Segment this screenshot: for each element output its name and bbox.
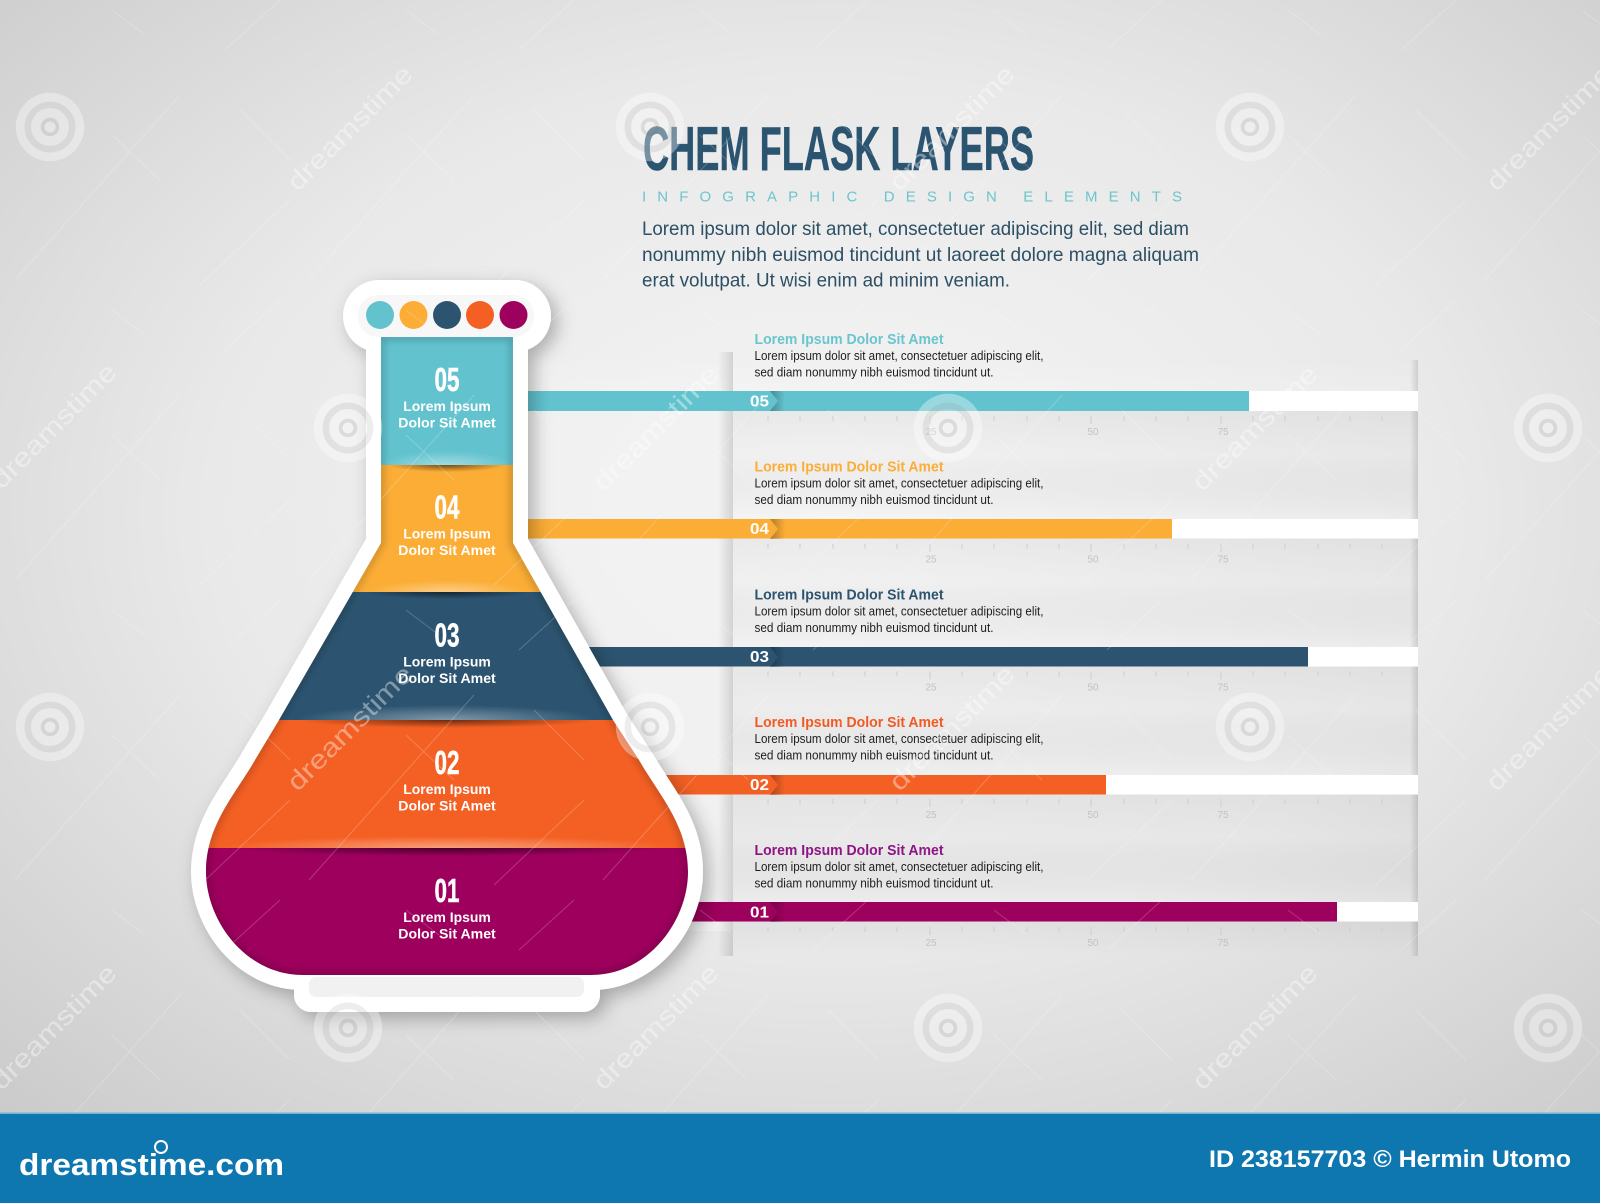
row 02 chevron	[770, 775, 785, 795]
row 04 scale	[768, 544, 1382, 566]
row 04 chevron	[770, 519, 785, 539]
flask	[200, 280, 700, 1012]
row 01 description: sed diam nonummy nibh euismod tincidunt ut.	[754, 876, 994, 890]
row 02 bar track	[1100, 775, 1418, 794]
flask inner shadow	[206, 337, 688, 975]
row 04 description: sed diam nonummy nibh euismod tincidunt ut.	[754, 493, 994, 507]
row 02 scale: 75	[1217, 810, 1229, 821]
row 01 scale: 75	[1217, 938, 1229, 949]
layer 03 label: 03	[434, 616, 460, 653]
row 04 description: Lorem ipsum dolor sit amet, consectetuer adipiscing elit,	[754, 477, 1044, 491]
row 05 scale: 75	[1217, 427, 1229, 438]
row 03 description: Lorem ipsum dolor sit amet, consectetuer adipiscing elit,	[754, 604, 1044, 618]
row 02 bar value	[640, 775, 1106, 794]
row 03 bar track	[1300, 647, 1418, 666]
layer 03	[279, 592, 613, 720]
layer 01 label	[398, 872, 496, 942]
row 01 description: Lorem ipsum dolor sit amet, consectetuer adipiscing elit,	[754, 860, 1044, 874]
row 04 heading: Lorem Ipsum Dolor Sit Amet	[754, 459, 944, 476]
flask cap inner	[358, 295, 534, 337]
layer 01 label: Lorem Ipsum	[403, 909, 491, 925]
row 03 heading: Lorem Ipsum Dolor Sit Amet	[754, 586, 944, 603]
row 04 description	[754, 477, 1044, 507]
row 05 scale: 25	[925, 427, 937, 438]
row 03 scale: 25	[925, 682, 937, 693]
row 01	[680, 842, 1418, 949]
flask base inner	[309, 977, 584, 997]
layer 01	[200, 840, 700, 975]
row 01 chevron	[770, 902, 785, 922]
watermark overlay: dreamstime	[587, 359, 725, 497]
intro paragraph: Lorem ipsum dolor sit amet, consectetuer adipiscing elit, sed diam	[642, 218, 1189, 240]
row 05	[520, 331, 1418, 438]
footer band	[0, 1112, 1600, 1203]
layer 01 label: 01	[434, 872, 460, 909]
row 02 heading: Lorem Ipsum Dolor Sit Amet	[754, 714, 944, 731]
row 04 number: 04	[750, 521, 769, 538]
layer 04 label: Lorem Ipsum	[403, 526, 491, 542]
panel: chart background	[528, 352, 1418, 956]
row 03 description	[754, 604, 1044, 635]
flask layers	[200, 337, 700, 975]
row 05 description	[754, 349, 1044, 380]
footer credit: ID 238157703 © Hermin Utomo	[1209, 1146, 1571, 1173]
row 02 scale: 50	[1087, 810, 1099, 821]
row 03 scale: 50	[1087, 682, 1099, 693]
row 04 scale: 50	[1087, 555, 1099, 566]
row 03 description: sed diam nonummy nibh euismod tincidunt ut.	[754, 621, 994, 635]
watermark overlay: dreamstime	[1480, 59, 1600, 197]
footer logo: dreamstime.com	[19, 1147, 284, 1182]
row 01 heading: Lorem Ipsum Dolor Sit Amet	[754, 842, 944, 859]
layer 03 label: Dolor Sit Amet	[398, 670, 496, 686]
layer 04 label: Dolor Sit Amet	[398, 542, 496, 558]
row 04	[520, 459, 1418, 566]
row 05 bar value	[520, 391, 1249, 411]
watermark overlay: dreamstime	[281, 659, 419, 797]
flask white outline	[206, 280, 688, 1012]
row 02 description: Lorem ipsum dolor sit amet, consectetuer adipiscing elit,	[754, 732, 1044, 746]
row 02 scale: 25	[925, 810, 937, 821]
watermark overlay: dreamstime	[883, 659, 1021, 797]
intro paragraph	[642, 218, 1199, 292]
row 05 description: sed diam nonummy nibh euismod tincidunt ut.	[754, 366, 994, 380]
layer 02 label	[398, 744, 496, 814]
watermark overlay: dreamstime	[1480, 659, 1600, 797]
layer 02 label: Dolor Sit Amet	[398, 798, 496, 814]
row 02 number: 02	[750, 777, 769, 794]
row 03	[560, 586, 1418, 693]
row 01 number: 01	[750, 904, 769, 922]
flask colour dots	[366, 301, 528, 329]
layer 05 label: Lorem Ipsum	[403, 398, 491, 414]
watermark overlay: dreamstime	[1186, 359, 1324, 497]
layer 03 label	[398, 616, 496, 686]
layer 02 label: Lorem Ipsum	[403, 781, 491, 797]
layer 04	[352, 465, 541, 592]
layer 05 label	[398, 361, 496, 430]
row 04 bar value	[520, 519, 1172, 538]
watermark overlay: dreamstime	[1186, 958, 1324, 1096]
row 05 bar track	[1240, 391, 1418, 411]
layer 01 label: Dolor Sit Amet	[398, 926, 496, 942]
row 01 description	[754, 860, 1044, 890]
layer 02 label: 02	[434, 744, 460, 781]
row 03 bar value	[560, 647, 1308, 666]
row 05 description: Lorem ipsum dolor sit amet, consectetuer adipiscing elit,	[754, 349, 1044, 363]
row 03 number: 03	[750, 649, 769, 666]
row 05 number: 05	[750, 394, 769, 410]
layer 05	[381, 337, 513, 465]
row 01 scale: 50	[1087, 938, 1099, 949]
watermark overlay: dreamstime	[281, 59, 419, 197]
row 03 chevron	[770, 647, 785, 667]
layer 05 label: Dolor Sit Amet	[398, 414, 496, 430]
title: CHEM FLASK LAYERS	[643, 115, 1034, 184]
row 05 scale: 50	[1087, 427, 1099, 438]
row 05 heading: Lorem Ipsum Dolor Sit Amet	[754, 331, 944, 348]
row 03 scale: 75	[1217, 682, 1229, 693]
watermark overlay: dreamstime	[883, 59, 1021, 197]
row 04 scale: 25	[925, 555, 937, 566]
row 01 bar track	[1330, 902, 1418, 922]
row 05 scale	[768, 416, 1382, 438]
row 02 description: sed diam nonummy nibh euismod tincidunt ut.	[754, 748, 994, 762]
row 01 scale: 25	[925, 938, 937, 949]
row 04 scale: 75	[1217, 555, 1229, 566]
layer 04 label: 04	[434, 489, 460, 526]
row 02	[640, 714, 1418, 821]
layer 03 label: Lorem Ipsum	[403, 653, 491, 669]
layer 04 label	[398, 489, 496, 558]
intro paragraph: erat volutpat. Ut wisi enim ad minim veniam.	[642, 270, 1010, 292]
subtitle: INFOGRAPHIC DESIGN ELEMENTS	[642, 188, 1182, 206]
row 01 bar value	[680, 902, 1337, 922]
layer 02	[208, 720, 686, 848]
row 02 description	[754, 732, 1044, 762]
row 02 scale	[768, 799, 1382, 821]
intro paragraph: nonummy nibh euismod tincidunt ut laoreet dolore magna aliquam	[642, 244, 1199, 266]
row 05 chevron	[770, 391, 785, 411]
row 01 scale	[768, 927, 1382, 949]
row 03 scale	[768, 671, 1382, 693]
watermark overlay: dreamstime	[587, 958, 725, 1096]
row 04 bar track	[1160, 519, 1418, 538]
layer 05 label: 05	[434, 361, 460, 398]
